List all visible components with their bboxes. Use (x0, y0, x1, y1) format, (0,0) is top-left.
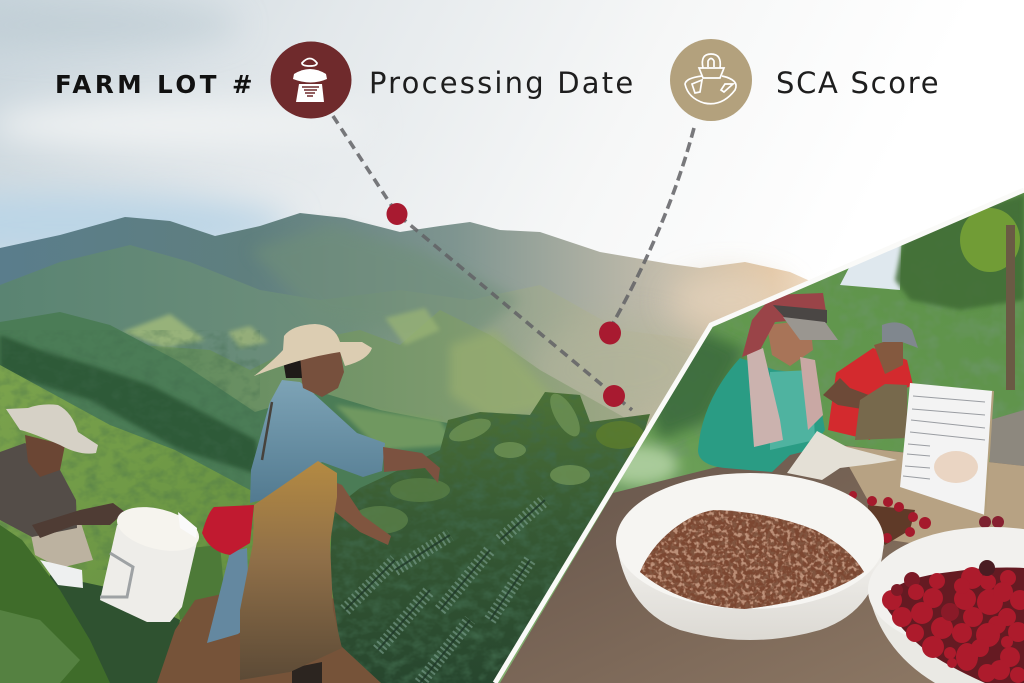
bowl of red cherries (868, 527, 1024, 683)
denim skirt (207, 548, 250, 643)
straw hat (254, 324, 372, 376)
front ridges (150, 310, 624, 423)
lower arm reaching down (333, 483, 391, 545)
label: sca score: SCA Score (776, 66, 940, 100)
marker: upper red dot (386, 203, 408, 225)
trousers (30, 520, 93, 568)
man in red shirt (823, 322, 918, 440)
apron (240, 461, 342, 680)
icon: cup in bowl score (670, 39, 752, 121)
wooden table (500, 445, 1024, 683)
foreground bushes and soil (178, 546, 223, 620)
forest backdrop (490, 190, 1024, 683)
extended arm (383, 447, 440, 483)
face (25, 435, 65, 477)
coffee bush (320, 385, 660, 683)
header label: farm lot: FARM LOT # (55, 70, 256, 99)
mountain landscape (0, 213, 830, 683)
arm (32, 503, 125, 538)
shirt (0, 443, 77, 537)
white sack (40, 560, 83, 588)
leg (292, 662, 322, 683)
marker: lower red dot (603, 385, 625, 407)
marker: middle red dot (599, 322, 621, 344)
sky patch (840, 246, 902, 290)
label: processing date: Processing Date (369, 66, 635, 100)
dark trees (895, 195, 1024, 310)
rock (990, 410, 1024, 466)
person: man picker with cap (0, 404, 125, 588)
shirt (250, 380, 385, 503)
panel: coffee table scene (490, 190, 1024, 683)
head (297, 350, 344, 397)
person: woman picker with straw hat (202, 324, 440, 683)
info card (900, 383, 993, 515)
middle ridges (0, 245, 648, 427)
bowl of dried coffee (616, 473, 884, 640)
cherries (882, 560, 1024, 683)
white diagonal divider (495, 190, 1024, 683)
dashed line: processing date to marker (333, 116, 632, 410)
dark tree band (0, 335, 260, 475)
distant mountains (0, 213, 808, 340)
near green hill (0, 312, 448, 496)
icon: white bucket (100, 499, 204, 622)
red bag (202, 505, 254, 555)
woman in teal (698, 293, 897, 480)
hill foliage texture (0, 330, 260, 570)
coffee cherries on table (849, 491, 1004, 545)
icon: processing station (270, 42, 352, 118)
dashed line: score to marker (612, 128, 694, 325)
bright terraced slope (0, 365, 334, 624)
cap (6, 404, 98, 454)
foreground leaf (0, 525, 110, 683)
